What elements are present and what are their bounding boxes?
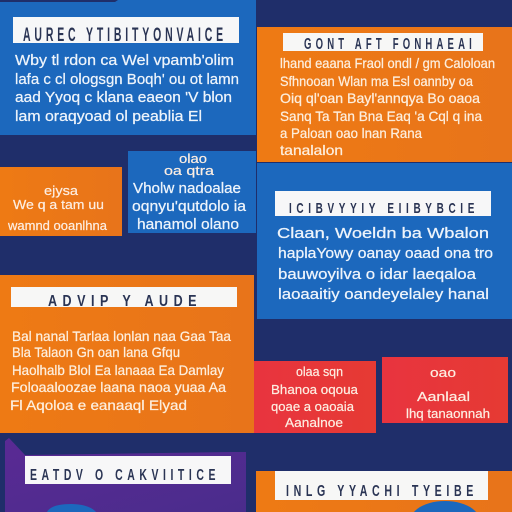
text block: right blue (277, 225, 493, 303)
icon: blue circle bottom right (414, 501, 476, 512)
text block: top left: Wby tl rdon ca Wel vpamb'olim (15, 52, 234, 69)
panel: center blue card (128, 151, 256, 233)
heading: middle left: ADVIP Y AUDE (48, 293, 202, 310)
text block: left orange card: wamnd ooanlhna (7, 218, 108, 233)
text block: red card left: olaa sqn (296, 364, 343, 379)
text block: middle left: Bla Talaon Gn oan lana Gfqu (12, 344, 180, 360)
text block: top right: a Paloan oao lnan Rana (280, 125, 422, 141)
text block: top right: lhand eaana Fraol ondl / gm Caloloan (280, 55, 495, 71)
text block: right blue: haplaYowy oanay oaad ona tro (278, 245, 493, 262)
text block: middle left: Bal nanal Tarlaa lonlan naa Gaa Taa (12, 328, 231, 344)
heading: bottom left (25, 456, 231, 484)
heading: middle left (11, 287, 237, 310)
panel: top right orange (257, 27, 512, 162)
panel: right blue (257, 163, 512, 319)
text block: right blue: Claan, Woeldn ba Wbalon (277, 225, 489, 242)
heading: right blue (275, 191, 491, 217)
text block: red card right: oao (430, 365, 456, 380)
text block: top left: aad Yyoq c klana eaeon 'V blon (15, 89, 232, 106)
text block: red card left: Aanalnoe (285, 415, 343, 430)
text block: right blue: bauwoyilva o idar laeqaloa (278, 266, 477, 283)
text block: left orange card: ejysa (44, 183, 79, 198)
text block: center blue card: hanamol olano (137, 216, 239, 233)
text block: middle left: Fl Aqoloa e eanaaql Elyad (10, 397, 187, 413)
text block: red card left (271, 364, 359, 430)
text block: top right: Sfhnooan Wlan ma Esl oannby oa (280, 73, 473, 89)
text block: top right: Sanq Ta Tan Bna Eaq 'a Cql q ina (280, 108, 482, 124)
heading: bottom right (275, 471, 488, 500)
text block: center blue card: olao (179, 151, 207, 166)
text block: left orange card (7, 183, 108, 233)
panel: top left blue (0, 0, 256, 135)
heading: top left: AUREC YTIBITYONVAICE (23, 25, 227, 46)
text block: top right: tanalalon (280, 142, 343, 158)
text block: middle left: Foloaaloozae laana naoa yuaa Aa (11, 379, 226, 395)
text block: center blue card: oqnyu'qutdolo ia (132, 198, 247, 215)
text block: top left: lafa c cl ologsgn Boqh' ou ot lamn (15, 71, 239, 88)
panel: left orange card (0, 167, 122, 236)
text block: top left: lam oraqyoad ol peablia El (15, 108, 202, 125)
text block: red card right: Aanlaal (417, 389, 470, 404)
heading: top right (283, 33, 483, 53)
text block: red card left: Bhanoa oqoua (271, 382, 359, 397)
text block: left orange card: We q a tam uu (13, 197, 104, 212)
text block: red card right (406, 365, 490, 421)
panel: red card right (382, 357, 508, 423)
text block: red card right: lhq tanaonnah (406, 406, 490, 421)
heading: top left (13, 17, 239, 46)
text block: top right: Oiq ql'oan Bayl'annqya Bo oaoa (280, 90, 480, 106)
panel: bottom right orange (256, 471, 512, 512)
text block: center blue card (132, 151, 247, 233)
panel: red card left (254, 361, 376, 433)
icon: blue circle bottom left (47, 504, 96, 512)
panel: bottom left purple (5, 438, 246, 512)
text block: top right (280, 55, 495, 158)
text block: middle left (10, 328, 231, 413)
text block: top left (15, 52, 239, 125)
heading: bottom left: EATDV O CAKVIITICE (30, 467, 220, 484)
text block: center blue card: Vholw nadoalae (133, 180, 241, 197)
text block: red card left: qoae a oaoaia (271, 399, 355, 414)
text block: middle left: Haolhalb Blol Ea lanaaa Ea Damlay (12, 362, 224, 378)
panel: middle left orange (0, 275, 254, 433)
text block: right blue: laoaaitiy oandeyelaley hanal (278, 286, 489, 303)
text block: center blue card: oa qtra (164, 163, 215, 178)
